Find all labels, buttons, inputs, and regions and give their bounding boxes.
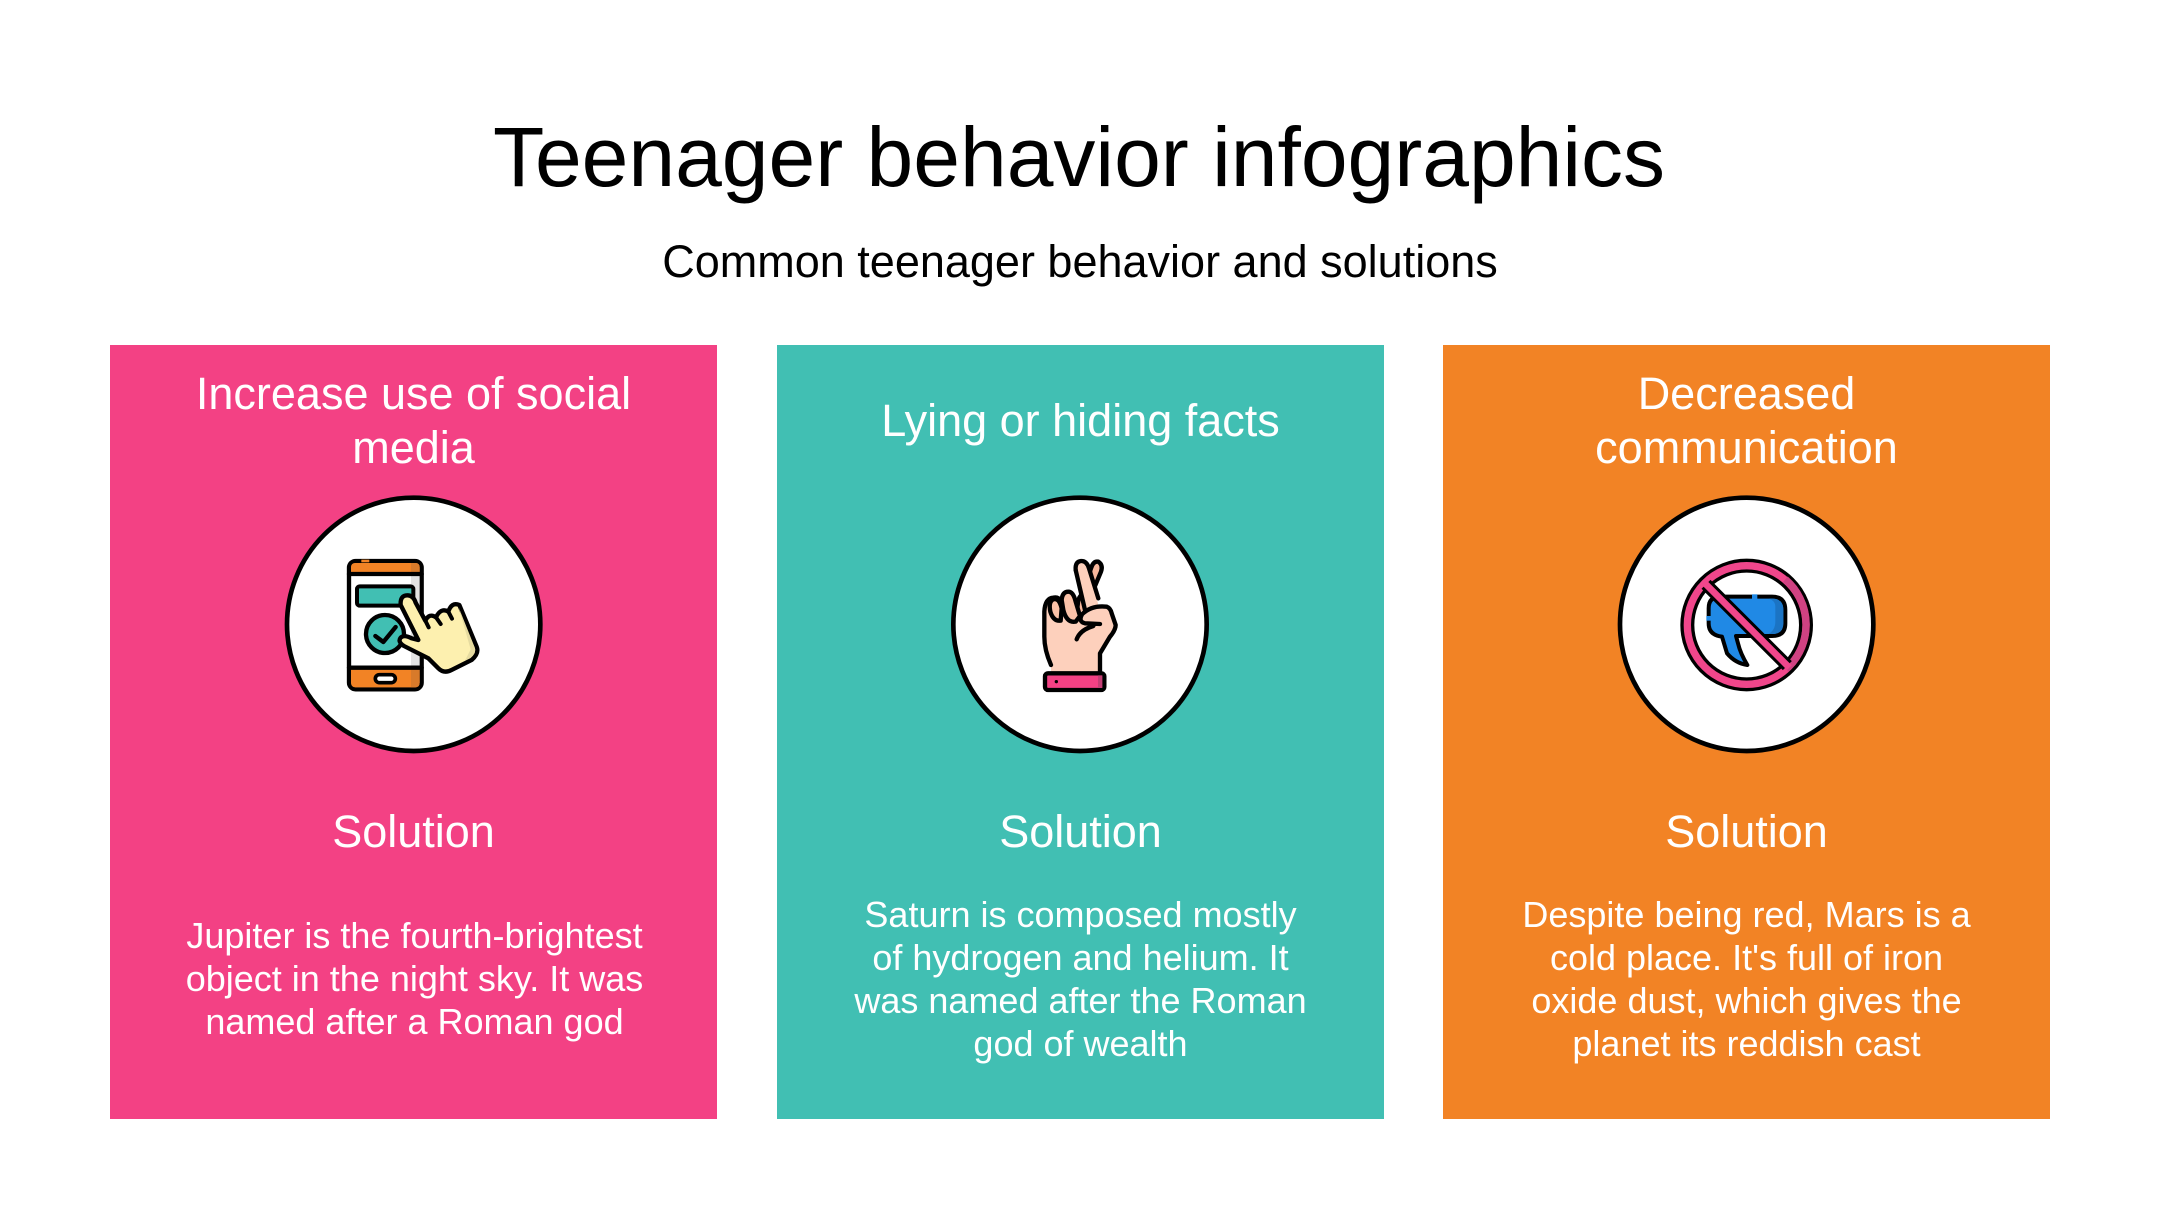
solution text: of hydrogen and helium. It [872, 937, 1289, 978]
panel: communication [1443, 345, 2050, 1119]
solution text: Saturn is composed mostly [864, 894, 1297, 934]
title: Teenager behavior infographics [493, 110, 1665, 204]
icon: crossed fingers [953, 498, 1207, 751]
panel: social media [110, 345, 717, 1119]
heading: decreased communication: communication [1595, 422, 1898, 473]
subtitle: Common teenager behavior and solutions [662, 236, 1498, 287]
heading: increase use of social media [196, 368, 631, 473]
solution text: god of wealth [973, 1023, 1188, 1064]
icon: phone with tapping hand [287, 498, 540, 751]
solution text: Jupiter is the fourth-brightest [186, 914, 643, 956]
solution text: Despite being red, Mars is a [1522, 894, 1971, 934]
solution text: named after a Roman god [205, 1001, 624, 1042]
heading: decreased communication [1595, 368, 1898, 473]
heading: decreased communication: Decreased [1638, 368, 1855, 419]
solution text [854, 894, 1307, 1064]
solution heading: Solution [332, 806, 495, 856]
heading: increase use of social media: Increase use of social [196, 368, 631, 419]
solution text [1522, 894, 1971, 1064]
solution text: object in the night sky. It was [186, 958, 643, 999]
solution text [186, 914, 643, 1042]
panel: lying [777, 345, 1384, 1119]
solution text: was named after the Roman [854, 980, 1307, 1021]
solution heading: Solution [1665, 806, 1828, 856]
icon: no chat bubble [1620, 498, 1873, 751]
heading: increase use of social media: media [352, 422, 475, 473]
heading: lying or hiding facts: Lying or hiding facts [881, 395, 1280, 446]
solution text: cold place. It's full of iron [1550, 937, 1943, 978]
solution text: planet its reddish cast [1572, 1023, 1921, 1064]
solution text: oxide dust, which gives the [1531, 980, 1962, 1021]
solution heading: Solution [999, 806, 1162, 856]
